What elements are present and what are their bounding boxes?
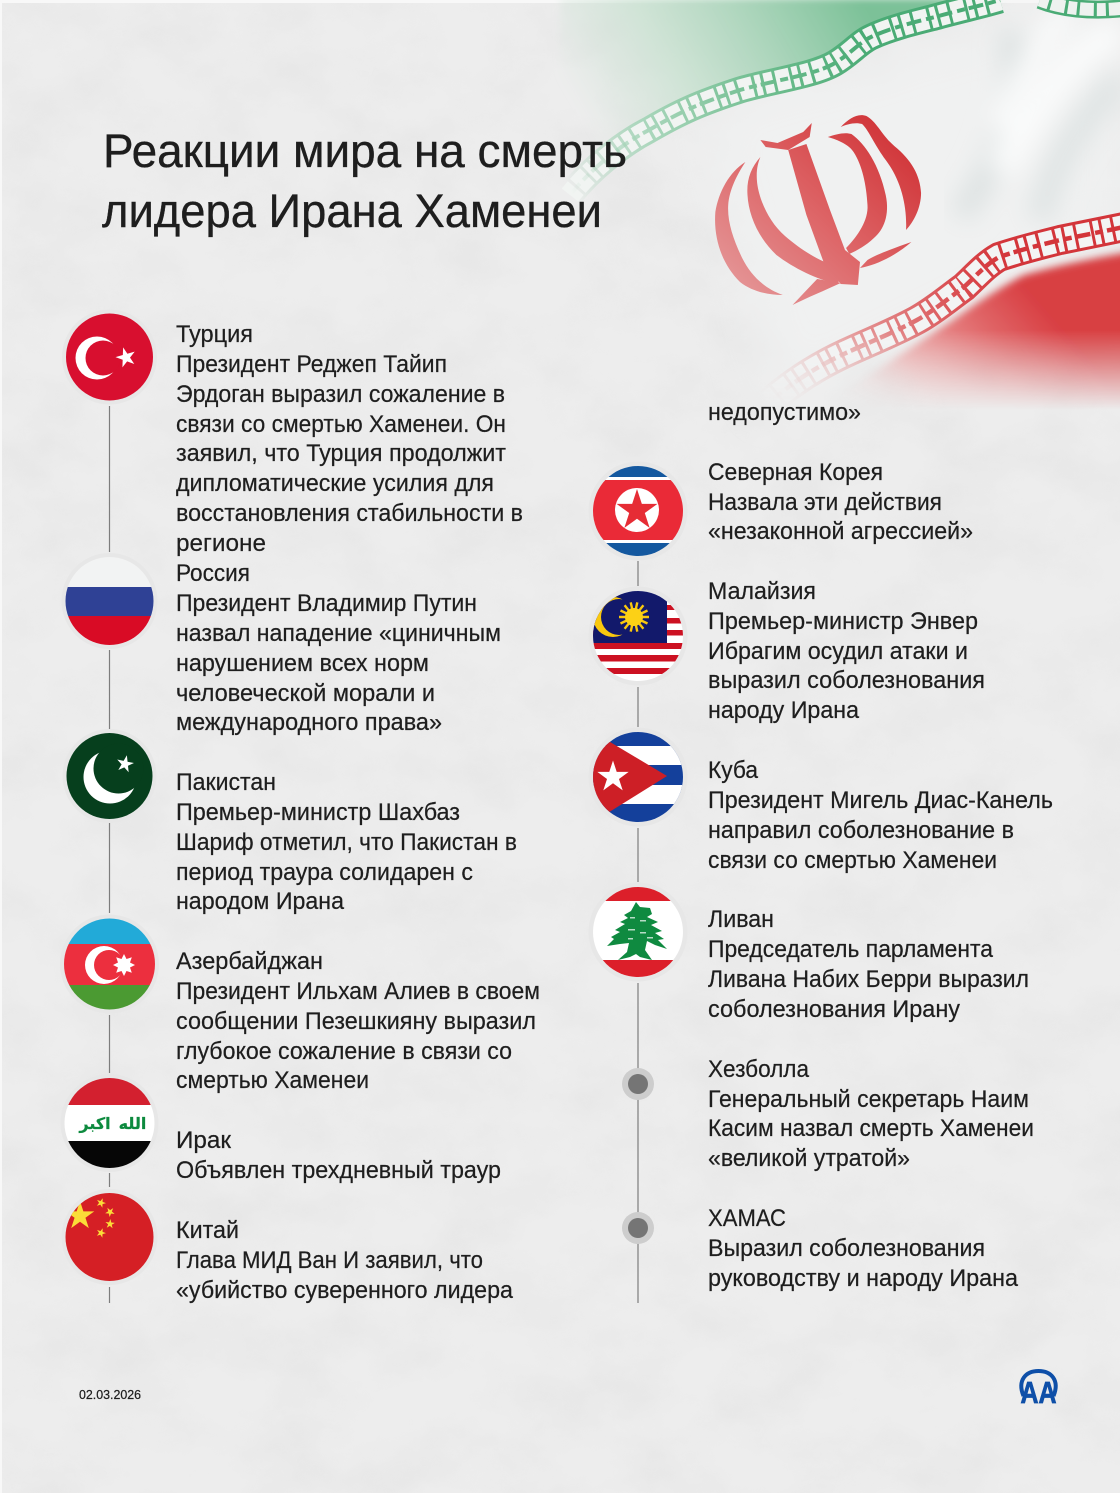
text block: Azerbaijan: глубокое сожаление в связи со bbox=[176, 1038, 512, 1065]
text block: Turkey: Президент Реджеп Тайип bbox=[176, 351, 447, 378]
left timeline connector lines bbox=[108, 406, 110, 1303]
flag: Pakistan bbox=[66, 729, 152, 819]
text block: Turkey bbox=[176, 321, 523, 557]
text block: China continuation: недопустимо» bbox=[708, 399, 861, 426]
text block: Iraq: Объявлен трехдневный траур bbox=[176, 1157, 501, 1184]
text block: Cuba: Президент Мигель Диас-Канель bbox=[708, 787, 1053, 814]
text block: Turkey: заявил, что Турция продолжит bbox=[176, 440, 506, 467]
text block: North Korea: Северная Корея bbox=[708, 459, 883, 486]
text block: Hezbollah bbox=[708, 1056, 1034, 1172]
flag: Cuba bbox=[593, 732, 683, 822]
flag green stripe bbox=[560, 0, 1000, 205]
text block: Azerbaijan: Президент Ильхам Алиев в своем bbox=[176, 978, 540, 1005]
title bbox=[102, 124, 627, 237]
flag white field bbox=[700, 0, 1120, 400]
text block: Hamas: ХАМАС bbox=[708, 1205, 786, 1232]
text block: Hezbollah: Касим назвал смерть Хаменеи bbox=[708, 1115, 1034, 1142]
text block: Iraq: Ирак bbox=[176, 1127, 231, 1154]
flag: Lebanon bbox=[593, 887, 683, 977]
text block: China: Глава МИД Ван И заявил, что bbox=[176, 1247, 483, 1274]
text block: Pakistan: период траура солидарен с bbox=[176, 859, 473, 886]
marker: Hamas bbox=[622, 1212, 654, 1244]
flag fabric folds bbox=[960, 10, 1120, 220]
text block: Russia: международного права» bbox=[176, 709, 442, 736]
text block: Cuba: Куба bbox=[708, 757, 759, 784]
green ornament band bbox=[570, 0, 1120, 195]
flag: North Korea bbox=[593, 466, 683, 556]
text block: Turkey: связи со смертью Хаменеи. Он bbox=[176, 411, 506, 438]
text block: Malaysia: Премьер-министр Энвер bbox=[708, 608, 978, 635]
text block: Lebanon bbox=[708, 906, 1029, 1023]
text block: Russia: назвал нападение «циничным bbox=[176, 620, 501, 647]
text block: Lebanon: Председатель парламента bbox=[708, 936, 994, 963]
text block: North Korea bbox=[708, 459, 973, 545]
text block: Malaysia: Малайзия bbox=[708, 578, 816, 605]
flag red stripe bbox=[871, 247, 1120, 406]
text block: Turkey: регионе bbox=[176, 530, 266, 557]
text block: Hamas: Выразил соболезнования bbox=[708, 1235, 985, 1262]
text block: Azerbaijan bbox=[176, 948, 540, 1094]
right timeline connector lines bbox=[637, 561, 639, 1303]
text block: Hezbollah: Хезболла bbox=[708, 1056, 810, 1083]
text block: China: «убийство суверенного лидера bbox=[176, 1277, 514, 1304]
text block: Cuba: направил соболезнование в bbox=[708, 817, 1014, 844]
title: Реакции мира на смерть bbox=[103, 124, 627, 177]
flag: China bbox=[66, 1193, 154, 1281]
text block: Iraq bbox=[176, 1127, 501, 1184]
text block: Lebanon: Ливана Набих Берри выразил bbox=[708, 966, 1029, 993]
text block: Russia: Президент Владимир Путин bbox=[176, 590, 477, 617]
flag: Turkey bbox=[66, 314, 153, 400]
flag: Iraq: الله bbox=[119, 1116, 146, 1133]
red ornament band bbox=[770, 227, 1120, 402]
text block: Turkey: восстановления стабильности в bbox=[176, 500, 523, 527]
text block: Pakistan: Шариф отметил, что Пакистан в bbox=[176, 829, 517, 856]
text block: Cuba: связи со смертью Хаменеи bbox=[708, 847, 997, 874]
text block: Hezbollah: «великой утратой» bbox=[708, 1145, 910, 1172]
Iranian flag background image bbox=[560, 0, 1120, 420]
text block: Russia: человеческой морали и bbox=[176, 680, 435, 707]
flag: Malaysia bbox=[593, 591, 683, 681]
flag: Russia bbox=[66, 568, 154, 645]
text block: Hezbollah: Генеральный секретарь Наим bbox=[708, 1086, 1029, 1113]
title: лидера Ирана Хаменеи bbox=[102, 184, 602, 237]
text block: Hamas bbox=[708, 1205, 1019, 1292]
text block: Turkey: Турция bbox=[176, 321, 253, 348]
text block: Pakistan: народом Ирана bbox=[176, 888, 345, 915]
emblem of Iran bbox=[715, 115, 921, 305]
text block: North Korea: Назвала эти действия bbox=[708, 489, 942, 516]
flag: Azerbaijan bbox=[64, 918, 155, 1010]
text block: Turkey: дипломатические усилия для bbox=[176, 470, 494, 497]
text block: China: Китай bbox=[176, 1217, 239, 1244]
text block: China bbox=[176, 1217, 514, 1304]
text block: Pakistan: Премьер-министр Шахбаз bbox=[176, 799, 460, 826]
text block: Malaysia bbox=[708, 578, 985, 724]
flag: Iraq bbox=[64, 1078, 154, 1168]
flag: Iraq: اكبر bbox=[78, 1116, 111, 1133]
text block: Malaysia: Ибрагим осудил атаки и bbox=[708, 638, 968, 665]
text block: Cuba bbox=[708, 757, 1053, 874]
text block: Malaysia: выразил соболезнования bbox=[708, 667, 985, 694]
text block: Azerbaijan: смертью Хаменеи bbox=[176, 1067, 369, 1094]
text block: Hamas: руководству и народу Ирана bbox=[708, 1265, 1019, 1292]
text block: Azerbaijan: сообщении Пезешкияну выразил bbox=[176, 1008, 536, 1035]
date: 02.03.2026 bbox=[79, 1388, 141, 1402]
text block: Pakistan: Пакистан bbox=[176, 769, 276, 796]
text block: Russia bbox=[176, 560, 501, 736]
text block: Malaysia: народу Ирана bbox=[708, 697, 860, 724]
text block: Russia: нарушением всех норм bbox=[176, 650, 429, 677]
text block: Pakistan bbox=[176, 769, 517, 915]
text block: Azerbaijan: Азербайджан bbox=[176, 948, 323, 975]
marker: Hezbollah bbox=[622, 1068, 654, 1100]
text block: Russia: Россия bbox=[176, 560, 250, 587]
text block: Lebanon: соболезнования Ирану bbox=[708, 996, 960, 1023]
text block: Turkey: Эрдоган выразил сожаление в bbox=[176, 381, 505, 408]
text block: Lebanon: Ливан bbox=[708, 906, 774, 933]
logo: Anadolu Agency: AA bbox=[1020, 1375, 1056, 1410]
text block: North Korea: «незаконной агрессией» bbox=[708, 518, 973, 545]
